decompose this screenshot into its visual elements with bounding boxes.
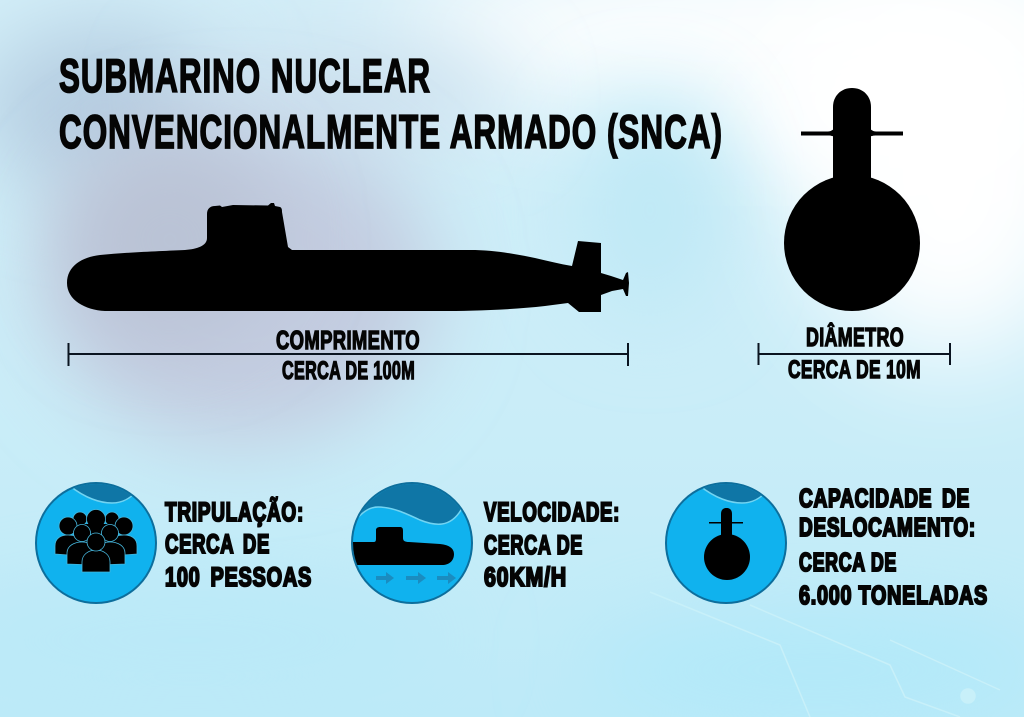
text: velocidade: CERCA DE	[484, 530, 583, 560]
title: CONVENCIONALMENTE ARMADO (SNCA)	[59, 105, 723, 158]
title: SUBMARINO NUCLEAR	[59, 49, 431, 102]
title	[59, 49, 723, 158]
icon: speed	[351, 482, 473, 604]
arrows	[376, 572, 456, 584]
text: tripulacao: TRIPULAÇÃO:	[165, 496, 304, 527]
label: cerca de 10m: CERCA DE 10M	[788, 356, 921, 384]
dimension: diametro	[758, 322, 950, 384]
text: tripulacao: 100 PESSOAS	[165, 562, 312, 592]
text: velocidade	[484, 497, 620, 592]
text: capacidade de deslocamento: CERCA DE	[799, 547, 897, 577]
icon: displacement	[666, 480, 786, 603]
dimension: comprimento	[68, 325, 628, 385]
text: velocidade: VELOCIDADE:	[484, 497, 620, 527]
label: diametro: DIÂMETRO	[806, 322, 904, 352]
label: cerca de 100m: CERCA DE 100M	[282, 357, 415, 385]
text: tripulacao	[165, 496, 312, 592]
text: capacidade de deslocamento	[799, 483, 988, 610]
text: tripulacao: CERCA DE	[165, 529, 270, 559]
submarine front profile	[784, 88, 920, 311]
label: comprimento: COMPRIMENTO	[276, 325, 420, 355]
icon: crew	[36, 480, 156, 603]
text: velocidade: 60KM/H	[484, 562, 567, 592]
submarine side profile	[67, 203, 629, 312]
